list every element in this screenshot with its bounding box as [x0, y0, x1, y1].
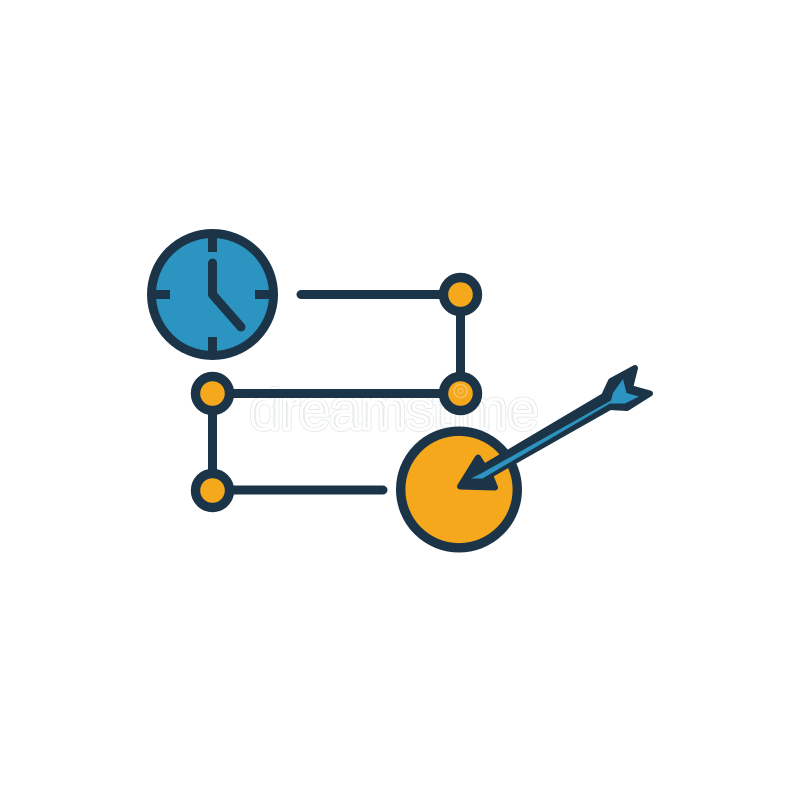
node: bottom left	[196, 474, 230, 508]
arrow blue fill	[471, 379, 639, 478]
clock tick marks	[154, 236, 271, 353]
clock hands	[212, 263, 241, 327]
icon: arrow	[460, 368, 650, 488]
node: top right	[444, 278, 478, 312]
connector path: clock through nodes to target	[212, 294, 460, 490]
node: middle right	[444, 376, 478, 410]
node: middle left	[196, 376, 230, 410]
arrow outline	[460, 368, 650, 488]
icon: clock	[152, 234, 274, 356]
watermark text: dreamstime	[250, 378, 538, 441]
watermark text: dreamstime	[250, 378, 538, 441]
clock face	[152, 234, 274, 356]
icon: target circle	[401, 431, 517, 548]
